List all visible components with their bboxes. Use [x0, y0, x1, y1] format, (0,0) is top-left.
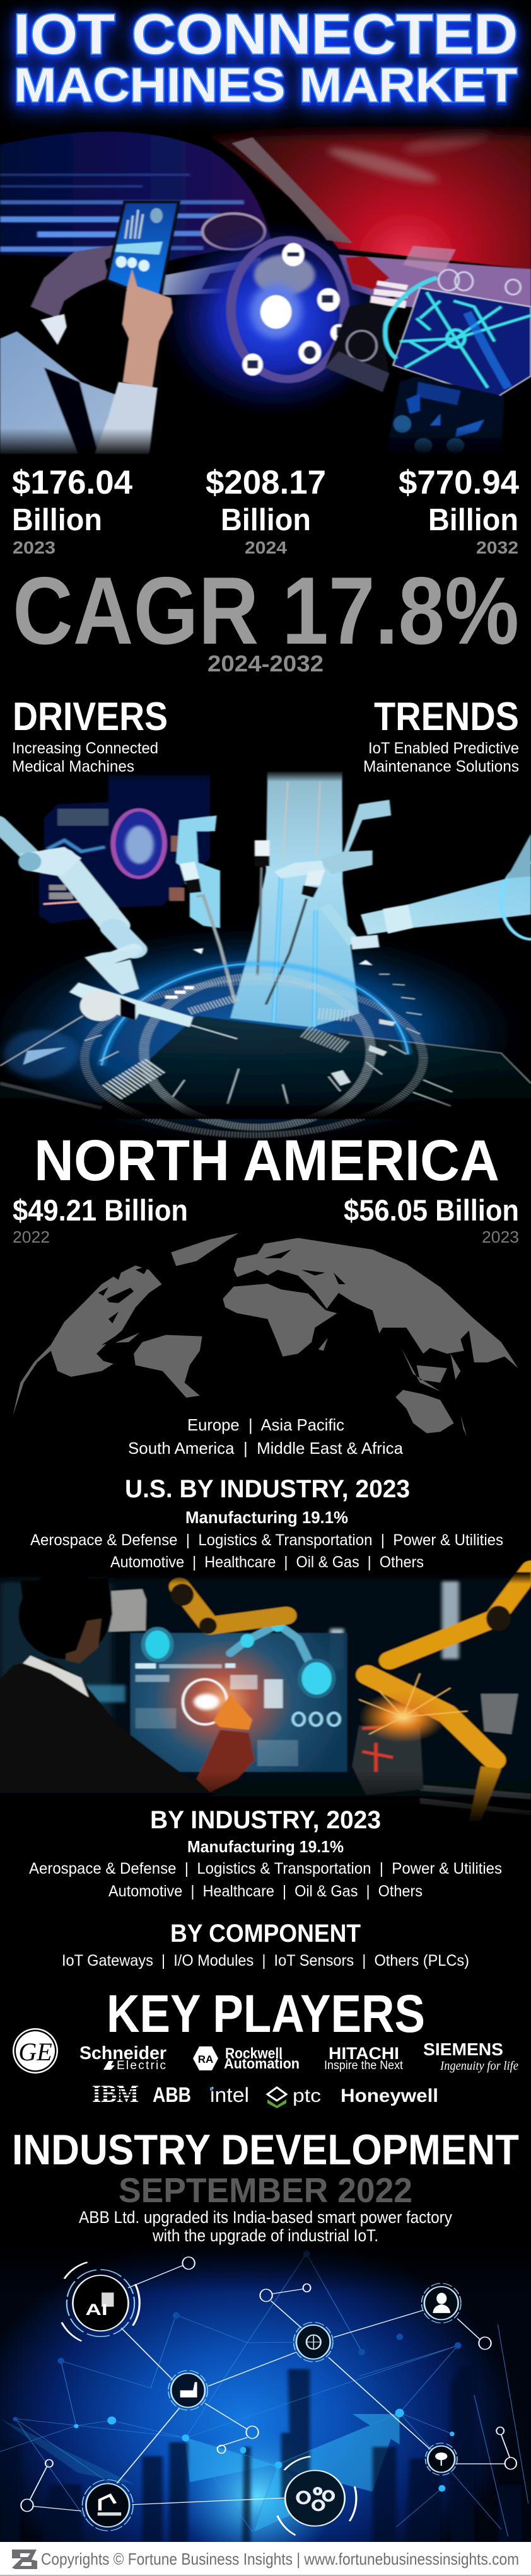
hud tick lines: [0, 974, 452, 1106]
right arm upper: [506, 833, 531, 879]
by component: [62, 1920, 469, 1970]
other regions: [128, 1415, 404, 1458]
vertical arm: [469, 1766, 501, 1821]
tablet buttons: [116, 256, 149, 272]
joint cap: [18, 852, 42, 871]
console screen: [417, 382, 460, 405]
tablet donut: [150, 208, 163, 223]
bright light: [180, 2426, 336, 2567]
hologram cyan ring: [143, 1628, 172, 1661]
hologram panel: [39, 773, 210, 924]
other regions: Europe | Asia Pacific: [187, 1415, 344, 1434]
column lines: [274, 782, 320, 1027]
door handle: [202, 269, 240, 289]
background lights: [85, 1581, 459, 1702]
node: AI: AI: [85, 2301, 108, 2319]
instrument 3: [266, 869, 359, 1004]
network image: [0, 2237, 531, 2567]
VR headset: [108, 1589, 146, 1632]
stat 2032: Billion: [428, 503, 518, 537]
orange robot arm lower: [368, 1675, 494, 1760]
logo: Rockwell Automation: [193, 2045, 300, 2072]
stat 2032: $770.94: [399, 464, 520, 501]
image bottom fade: [0, 1772, 531, 1824]
logo: GE: [13, 2028, 58, 2074]
red parts: [363, 1727, 393, 1772]
by component: BY COMPONENT: [170, 1920, 361, 1947]
stat 2023: [12, 464, 133, 557]
joint linking arms: [274, 861, 325, 879]
side window with motion streaks: [0, 132, 271, 260]
stat 2032: [399, 464, 520, 557]
node: AI: [57, 2261, 139, 2345]
hero fade: [0, 428, 531, 457]
logo: Schneider Electric: Schneider: [79, 2043, 166, 2063]
hero image: connected car interior: [0, 123, 531, 457]
table edge: [339, 1034, 531, 1083]
logo: Siemens: SIEMENS: [423, 2039, 503, 2059]
africa: [223, 1284, 337, 1357]
man head: [19, 1572, 110, 1659]
man hair: [20, 1578, 112, 1656]
development text: ABB Ltd. upgraded its India-based smart power factory: [79, 2208, 452, 2227]
light beams: [0, 2414, 400, 2532]
CAGR period: 2024-2032: [207, 651, 324, 676]
logo: Rockwell Automation: RA: [198, 2053, 213, 2065]
instrument 2: [255, 840, 269, 975]
stat 2032: 2032: [476, 538, 518, 557]
image top fade: [0, 2237, 531, 2292]
floating labels: [370, 281, 408, 308]
cyan band: [467, 313, 508, 388]
logo: Schneider Electric: [79, 2043, 166, 2072]
trends: IoT Enabled Predictive: [368, 740, 519, 757]
footer bar: [0, 2542, 531, 2576]
lower left wrist: [85, 948, 143, 994]
hud triangles: [23, 948, 373, 1065]
stat 2024: Billion: [221, 503, 311, 537]
panel data block: [57, 809, 108, 826]
centre console: [386, 376, 505, 454]
by industry: [29, 1806, 502, 1900]
value 2022: 2022: [13, 1227, 50, 1246]
left teal haze: [0, 1581, 112, 1731]
wheel centre icon: [260, 295, 291, 328]
hologram screen: [131, 1633, 347, 1772]
data panel: [325, 352, 390, 392]
table surface: [0, 1016, 531, 1117]
node: robot: [82, 2480, 133, 2531]
value 2022: [13, 1193, 188, 1246]
cyan curve: [385, 278, 437, 359]
small rings: [21, 2257, 516, 2512]
side mirror: [202, 214, 265, 250]
logo: IBM: IBM: [92, 2080, 139, 2108]
logo: Hitachi: [324, 2044, 404, 2072]
windshield red glow: [210, 126, 531, 269]
hud ring glow: [102, 963, 408, 1065]
icon glyphs: [247, 252, 341, 368]
development text: with the upgrade of industrial IoT.: [152, 2226, 378, 2245]
console knobs: [394, 393, 484, 453]
door panel: [163, 258, 260, 295]
right arm collar: [383, 905, 413, 934]
cuff left: [40, 314, 67, 345]
drivers: Increasing Connected: [12, 740, 158, 757]
logo: Rockwell Automation: Automation: [224, 2055, 300, 2072]
logo: Siemens: [423, 2039, 518, 2073]
node: cloud: [425, 2443, 457, 2475]
australia: [395, 1390, 454, 1433]
blue glow background: [0, 2237, 531, 2543]
small gauges: [293, 1713, 340, 1726]
madagascar: [318, 1338, 328, 1351]
dashboard dark column: [346, 256, 390, 289]
node: worker: [422, 2283, 461, 2323]
panel red line: [44, 900, 83, 905]
logo: Hitachi: Inspire the Next: [324, 2059, 404, 2072]
right hub: [501, 863, 531, 939]
title line 2: MACHINES MARKET: [14, 59, 517, 112]
value 2022: $49.21 Billion: [13, 1193, 188, 1227]
title line 1: IOT CONNECTED: [13, 3, 518, 66]
caribbean: [115, 1333, 139, 1343]
trends: [363, 695, 519, 775]
image top fade: [0, 1572, 531, 1584]
U.S. by industry: Aerospace & Defense | Logistics & Transportation | Power & Utilities: [30, 1531, 503, 1549]
south america: [134, 1335, 202, 1398]
floating icons: [242, 243, 347, 376]
sparks: [359, 1691, 447, 1743]
left hand: [30, 245, 124, 318]
map frame: [393, 288, 531, 399]
right hand and forearm: [122, 269, 173, 388]
title: [13, 3, 518, 112]
holographic top panel: [403, 246, 455, 274]
logo: PTC: [267, 2086, 321, 2108]
logo: Honeywell: Honeywell: [341, 2086, 438, 2106]
stat 2023: Billion: [12, 503, 102, 537]
lower left instrument: [69, 982, 237, 1039]
shirt collar: [23, 1656, 89, 1697]
mesh dots: [74, 2409, 455, 2492]
middle-left instrument holder: [176, 816, 220, 928]
windshield top fade: [210, 123, 531, 143]
logo: GE: GE: [18, 2038, 52, 2066]
dark mesh dots: [13, 2251, 461, 2421]
other regions: South America | Middle East & Africa: [128, 1439, 404, 1458]
footer logo: [12, 2550, 37, 2569]
by industry: Automotive | Healthcare | Oil & Gas | Others: [108, 1883, 423, 1900]
floor glow: [0, 921, 531, 1146]
gauge dial: [347, 331, 376, 361]
southeast asia: [401, 1348, 460, 1391]
panel right column: [169, 836, 186, 901]
right arm joint: [486, 1606, 511, 1631]
steering column top: [254, 255, 315, 295]
dashboard: [339, 255, 531, 318]
top arm joints: [171, 1584, 217, 1634]
node: factory: [168, 2370, 207, 2410]
triangle glow: [3, 1030, 78, 1079]
hand: [213, 1694, 252, 1730]
panel ring core: [125, 826, 154, 864]
panel wave: [47, 840, 105, 852]
hologram robot joints: [240, 1618, 334, 1697]
logo: Schneider Electric: Electric: [117, 2059, 166, 2072]
drivers: [12, 695, 168, 775]
map roads: [400, 293, 531, 388]
man jacket: [0, 1659, 217, 1818]
hologram readouts: [136, 1675, 298, 1766]
north america land: [13, 1265, 162, 1416]
hologram progress: [136, 1663, 235, 1669]
trends: Maintenance Solutions: [363, 758, 519, 775]
right arm elbow: [351, 935, 379, 949]
factory pipes: [420, 1785, 531, 1815]
thin mesh lines: [0, 2254, 528, 2536]
by industry: BY INDUSTRY, 2023: [150, 1806, 381, 1834]
by industry: Manufacturing 19.1%: [187, 1837, 344, 1856]
motion streaks: [0, 173, 244, 252]
shirt: [0, 332, 158, 454]
refinery silhouettes: [0, 2367, 522, 2543]
dial core: [194, 1694, 219, 1710]
orange robot arm top: [180, 1587, 286, 1626]
value 2023: [344, 1193, 519, 1246]
console dark: [325, 295, 396, 376]
image bottom fade: [0, 1097, 531, 1120]
central column: [230, 772, 359, 1027]
hologram dial: [183, 1680, 227, 1724]
new zealand sliver: [460, 1415, 467, 1436]
upper right joint arm: [318, 800, 391, 874]
stat 2024: [206, 464, 326, 557]
key players heading: KEY PLAYERS: [107, 1984, 425, 2043]
steering wheel: [231, 240, 345, 379]
left large arm: [0, 822, 134, 975]
value 2023: $56.05 Billion: [344, 1193, 519, 1227]
top-right gauges: [438, 270, 520, 294]
stat 2023: $176.04: [12, 464, 133, 501]
development text: [79, 2208, 452, 2245]
panel lower text: [49, 885, 73, 899]
eurasia: [234, 1238, 518, 1368]
U.S. by industry: Automotive | Healthcare | Oil & Gas | Others: [110, 1553, 424, 1571]
white connectors: [30, 2265, 510, 2511]
node: globe: [294, 2322, 333, 2362]
cuff right: [95, 382, 158, 454]
left arm joint: [20, 847, 81, 876]
tablet bars: [125, 210, 143, 239]
hud outer ring: [102, 963, 408, 1065]
seas: [237, 1250, 346, 1284]
man sleeve: [196, 1730, 255, 1792]
stat 2023: 2023: [13, 538, 55, 557]
image top fade: [0, 770, 531, 782]
logo: ABB: ABB: [153, 2083, 191, 2106]
gray tool head: [481, 1694, 518, 1734]
drivers: DRIVERS: [13, 695, 168, 739]
U.S. by industry: U.S. BY INDUSTRY, 2023: [125, 1475, 410, 1503]
by industry: Aerospace & Defense | Logistics & Transportation | Power & Utilities: [29, 1860, 502, 1877]
hud tick rings: [85, 977, 423, 1135]
windshield reflection: [325, 125, 492, 188]
stat 2024: 2024: [245, 538, 287, 557]
logo: Rockwell Automation: Rockwell: [225, 2045, 283, 2062]
instrument 1: [180, 862, 235, 1004]
floor left edge: [0, 1083, 102, 1108]
world map globe: [13, 1233, 518, 1436]
A-pillar: [232, 137, 352, 243]
orange robot arm right: [390, 1569, 531, 1661]
logo: Siemens: Ingenuity for life: [440, 2059, 518, 2073]
drivers: Medical Machines: [12, 758, 134, 775]
factory background: [0, 1572, 531, 1798]
development date: SEPTEMBER 2022: [119, 2171, 412, 2210]
logo: PTC: ptc: [293, 2086, 321, 2106]
tablet band: [115, 241, 163, 255]
stat 2024: $208.17: [206, 464, 326, 501]
logo: Intel: intel: [210, 2084, 249, 2106]
U.S. by industry: Manufacturing 19.1%: [185, 1508, 348, 1527]
by component: IoT Gateways | I/O Modules | IoT Sensors | Others (PLCs): [62, 1952, 469, 1970]
hologram robot: [230, 1624, 317, 1678]
man neck: [64, 1618, 102, 1663]
right large arm: [361, 876, 531, 935]
spark lines: [359, 1673, 467, 1734]
jacket dark strap: [44, 368, 98, 454]
tablet: [107, 202, 179, 300]
value 2023: 2023: [482, 1227, 519, 1246]
north america heading: NORTH AMERICA: [34, 1128, 499, 1193]
greenland: [171, 1233, 239, 1266]
U.S. by industry: [30, 1475, 503, 1571]
hudson bay and arctic waters: [98, 1265, 149, 1345]
panel purple ring: [113, 810, 165, 878]
blue steering glow: [159, 220, 390, 417]
machine: [352, 1726, 423, 1795]
surgical robot image: [0, 770, 531, 1146]
hud blocks: [165, 986, 395, 1086]
wheel hub: [250, 284, 301, 339]
logo: Hitachi: HITACHI: [329, 2044, 399, 2063]
VR industrial robot image: [0, 1569, 531, 1824]
node: gears: [274, 2456, 356, 2540]
